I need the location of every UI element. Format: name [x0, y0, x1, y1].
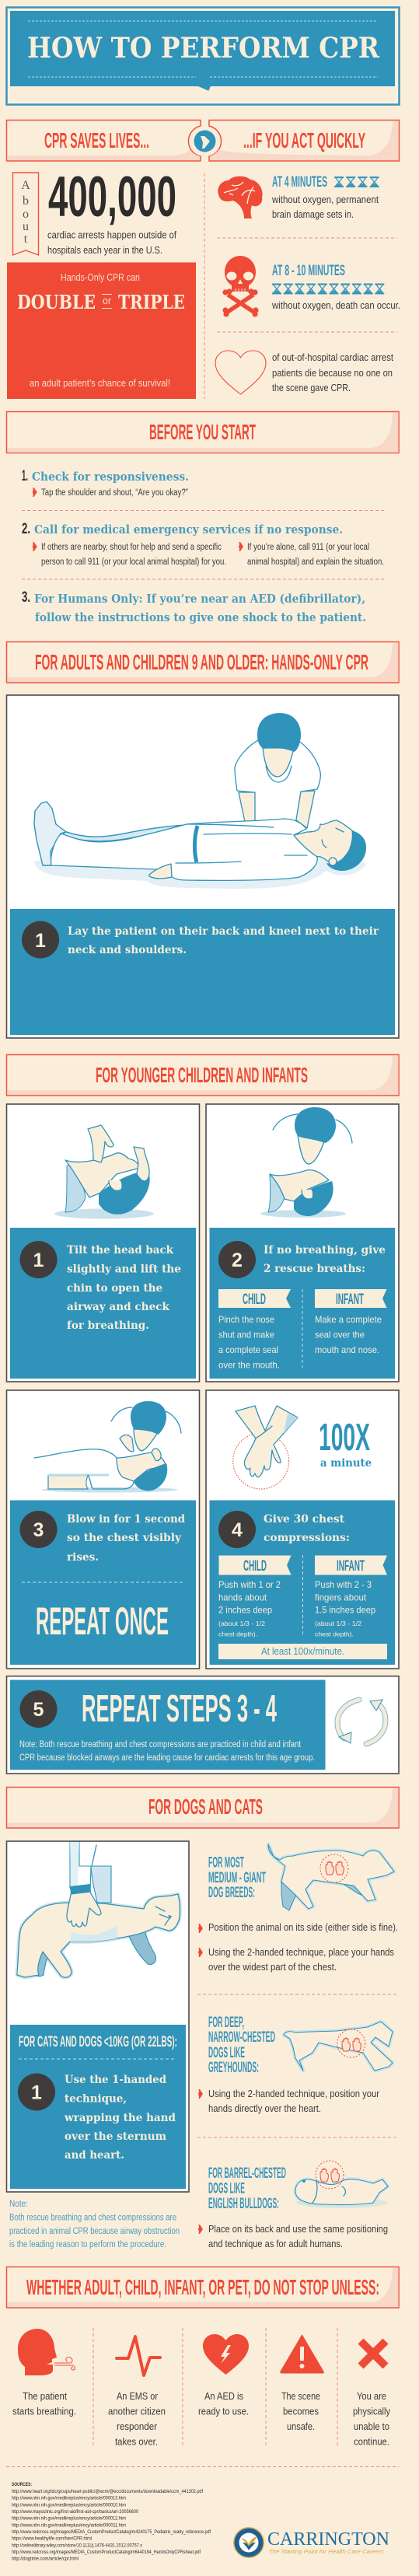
logo: Carrington: The Starting Point for Health Care Careers. — [269, 2548, 386, 2555]
caption box: Lay the patient on their back and kneel next to their — [68, 925, 379, 938]
block: medium to giant dogs — [198, 1844, 398, 1973]
100X a minute: 100X — [319, 1417, 370, 1459]
stop condition: EMS takes over: takes over. — [115, 2437, 158, 2448]
rescuer — [235, 713, 320, 828]
panel: step 5 repeat — [6, 1676, 399, 1774]
panel: step 3 blow — [6, 1390, 199, 1669]
caption box — [10, 1501, 196, 1665]
icon: heart with bolt — [203, 2334, 249, 2375]
banner: CPR saves lives — [6, 120, 400, 161]
rate bar — [218, 1644, 387, 1659]
animal note: Both rescue breathing and chest compressions are — [9, 2213, 176, 2222]
step number 2: 2 — [232, 1250, 243, 1271]
child breath instructions — [218, 1289, 291, 1370]
block: barrel-chested dogs: ENGLISH BULLDOGS: — [208, 2196, 279, 2212]
step number 5 — [20, 1690, 58, 1728]
icon: pulse line — [117, 2337, 160, 2375]
caption box: and heart. — [65, 2149, 124, 2162]
caption box: Tilt the head back — [67, 1244, 173, 1257]
animal note: is the leading reason to perform the procedure. — [9, 2240, 166, 2249]
infant breath instructions: mouth and nose. — [315, 1344, 379, 1355]
caption box: chin to open the — [67, 1282, 162, 1295]
stop condition: patient breathing: The patient — [23, 2391, 67, 2402]
icon: X mark — [361, 2341, 386, 2366]
step 3: For Humans Only: If you’re near an AED (defibrillator), — [34, 592, 365, 606]
child breath instructions: shut and make — [218, 1330, 274, 1340]
arrow icon — [194, 131, 216, 152]
ribbon: About: o — [23, 208, 29, 221]
step 1: Check for responsiveness. — [32, 470, 189, 484]
sources: http://www.heart.org/idc/groups/heart-public/@wcm/@ecc/documents/downloadable/ucm_441302.pdf — [12, 2489, 203, 2494]
step 2: If others are nearby, shout for help and send a specific — [41, 543, 222, 552]
child compressions: (about 1/3 - 1/2 — [218, 1620, 265, 1627]
infant breath instructions: seal over the — [315, 1330, 365, 1340]
stop condition: EMS takes over: An EMS or — [117, 2391, 158, 2402]
step 2: animal hospital) and explain the situation. — [247, 557, 384, 567]
caption box: technique, — [65, 2093, 127, 2106]
stop condition: scene unsafe — [281, 2335, 323, 2432]
step 2: person to call 911 (or your local animal hospital) for you. — [41, 557, 226, 567]
stop condition: scene unsafe: becomes — [283, 2406, 319, 2417]
block: deep narrow-chested dogs: FOR DEEP, — [208, 2015, 244, 2031]
stop condition: physically unable — [353, 2341, 391, 2448]
infant breath instructions: Make a complete — [315, 1314, 382, 1325]
icon: skull and crossbones — [222, 256, 259, 317]
infant breath instructions: INFANT — [336, 1291, 364, 1308]
infant compressions: fingers about — [315, 1592, 367, 1603]
infant compressions — [315, 1555, 387, 1638]
child compressions — [218, 1555, 291, 1638]
big number: 400,000 — [48, 166, 176, 229]
caption box — [10, 909, 395, 1035]
icon: head breathing — [18, 2329, 75, 2375]
caption box — [210, 1501, 395, 1665]
block: at 8-10 minutes — [222, 256, 400, 317]
note: CPR because blocked airways are the leading cause for cardiac arrests for this age group. — [19, 1753, 315, 1763]
stop condition: physically unable: unable to — [354, 2421, 389, 2432]
stop condition: EMS takes over: another citizen — [108, 2406, 166, 2417]
stat: 400,000: hospitals each year in the U.S. — [47, 245, 162, 256]
banner: do not stop unless — [6, 2267, 399, 2308]
block: at 4 minutes — [218, 174, 379, 220]
stop condition: AED ready: An AED is — [204, 2391, 243, 2402]
block: medium to giant dogs: MEDIUM - GIANT — [208, 1870, 266, 1886]
panel: adult hands-only CPR — [6, 695, 399, 1038]
sources: http://www.redcross.org/images/MEDIA_CustomProductCatalog/m4240175_Pediatric_ready_reference.pdf — [12, 2529, 211, 2535]
block: at 4 minutes: brain damage sets in. — [272, 209, 354, 220]
step number 1 — [18, 2073, 55, 2110]
step number 1: 1 — [35, 930, 46, 952]
infant compressions: Push with 2 - 3 — [315, 1579, 372, 1590]
caption box: 2 rescue breaths: — [264, 1263, 365, 1275]
block: deep narrow-chested dogs: hands directly over the heart. — [208, 2103, 321, 2114]
caption box: neck and shoulders. — [68, 944, 187, 956]
ribbon: About: u — [23, 220, 29, 233]
stop condition: physically unable: physically — [353, 2406, 391, 2417]
column divider — [204, 173, 205, 399]
caption box — [210, 1228, 395, 1379]
banner: adults and children — [6, 642, 399, 683]
panel: step 2 rescue breaths — [206, 1104, 399, 1382]
step 3: follow the instructions to give one shock to the patient. — [35, 611, 366, 624]
step number 1: 1 — [33, 1250, 44, 1271]
column dividers — [93, 2328, 337, 2446]
sources: http://www.nlm.nih.gov/medlineplus/ency/article/000013.htm — [12, 2496, 126, 2501]
sources: https://www.healthylife.com/hier/CPR.html — [12, 2536, 92, 2542]
caption box: If no breathing, give — [264, 1244, 386, 1257]
rate bar: At least 100x/minute. — [261, 1646, 344, 1657]
block: medium to giant dogs: Using the 2-handed technique, place your hands — [208, 1947, 394, 1958]
step number 3 — [20, 1511, 58, 1548]
caption box: slightly and lift the — [67, 1263, 181, 1275]
animal note: Note: — [9, 2200, 28, 2209]
description: cardiac arrests happen outside of — [47, 230, 176, 241]
child breath instructions: a complete seal — [218, 1344, 278, 1355]
step number 2 — [218, 1241, 256, 1278]
icon: 4 hourglasses — [334, 177, 379, 187]
block: heart statistic: patients die because no one on — [272, 368, 393, 379]
banner: CPR saves lives: CPR SAVES LIVES... — [44, 128, 149, 152]
red callout: Hands-Only CPR can — [61, 272, 140, 283]
ribbon: About: A — [21, 179, 30, 192]
child compressions: 2 inches deep — [218, 1605, 272, 1616]
banner: before you start: BEFORE YOU START — [149, 420, 256, 444]
block: heart statistic: of out-of-hospital cardiac arrest — [272, 352, 393, 363]
step 2: 2. — [22, 521, 30, 537]
banner: dogs and cats — [6, 1787, 399, 1828]
step 2: Call for medical emergency services if no response. — [34, 523, 343, 537]
block: barrel-chested dogs: DOGS LIKE — [208, 2180, 245, 2197]
sources: http://www.nlm.nih.gov/medlineplus/ency/article/000010.htm — [12, 2502, 126, 2508]
icon: repeat arrows — [337, 1700, 386, 1744]
caption box: rises. — [67, 1551, 99, 1564]
sources: SOURCES: — [12, 2482, 32, 2487]
infant compressions: (about 1/3 - 1/2 — [315, 1620, 361, 1627]
logo emblem — [233, 2527, 264, 2558]
step 1 — [22, 468, 189, 498]
stop condition: AED ready: ready to use. — [198, 2406, 249, 2417]
block: deep narrow-chested dogs — [198, 2015, 393, 2114]
child breath instructions: CHILD — [243, 1291, 266, 1308]
step number 1: 1 — [31, 2082, 42, 2104]
illustration: blowing into mouth — [34, 1401, 181, 1493]
step number 5: 5 — [33, 1699, 44, 1721]
block: heart statistic: the scene gave CPR. — [272, 383, 351, 393]
block: at 8-10 minutes: without oxygen, death can occur. — [271, 300, 400, 311]
caption box: so the chest visibly — [67, 1532, 182, 1544]
block: barrel-chested dogs: and technique as for adult humans. — [208, 2239, 343, 2249]
step number 4: 4 — [232, 1519, 243, 1541]
step 3 — [22, 589, 366, 624]
note — [19, 1740, 315, 1763]
100X a minute: a minute — [320, 1457, 372, 1470]
banner: dogs and cats: FOR DOGS AND CATS — [148, 1795, 263, 1819]
red callout — [7, 263, 196, 399]
banner: younger children — [6, 1054, 399, 1096]
infant compressions: chest depth). — [315, 1630, 354, 1638]
panel: step 4 compressions — [206, 1390, 399, 1669]
icon: 10 hourglasses — [272, 283, 384, 294]
block: deep narrow-chested dogs: GREYHOUNDS: — [208, 2060, 259, 2076]
illustration: head tilt — [54, 1125, 154, 1219]
stop condition: physically unable: continue. — [354, 2437, 389, 2448]
illustration: rescuer and patient — [34, 713, 367, 889]
block: deep narrow-chested dogs: Using the 2-handed technique, position your — [208, 2088, 379, 2099]
red callout: TRIPLE — [118, 291, 185, 313]
child compressions: CHILD — [243, 1558, 267, 1575]
step 3: 3. — [22, 589, 30, 606]
ribbon: About — [12, 173, 39, 255]
stop condition: EMS takes over — [108, 2337, 166, 2448]
sources — [12, 2482, 211, 2562]
caption box: airway and check — [67, 1301, 169, 1313]
infant breath instructions — [315, 1289, 387, 1355]
stop condition: scene unsafe: The scene — [281, 2391, 320, 2402]
step 2: If you’re alone, call 911 (or your local — [247, 543, 369, 552]
checklist — [22, 468, 385, 624]
child breath instructions: over the mouth. — [218, 1359, 280, 1370]
stop condition: EMS takes over: responder — [117, 2421, 157, 2432]
icon: heart outline — [215, 351, 266, 394]
title banner — [6, 8, 400, 104]
sources: http://dogtime.com/article/cpr.html — [12, 2557, 79, 2562]
step number 4 — [218, 1511, 256, 1548]
caption box — [10, 1228, 196, 1379]
block: at 4 minutes: without oxygen, permanent — [271, 194, 379, 205]
panel: step 1 tilt head — [6, 1104, 199, 1382]
caption box: FOR CATS AND DOGS <10KG (OR 22LBS): — [19, 2034, 177, 2050]
caption box: Give 30 chest — [264, 1513, 345, 1526]
block: medium to giant dogs: over the widest part of the chest. — [208, 1962, 337, 1973]
stop condition: AED ready — [198, 2334, 249, 2417]
title text: HOW TO PERFORM CPR — [27, 32, 380, 65]
caption box — [10, 2025, 186, 2189]
animal note: practiced in animal CPR because airway obstruction — [9, 2227, 180, 2236]
stop condition: patient breathing — [12, 2329, 76, 2417]
sources: http://www.mayoclinic.org/first-aid/first-aid-cpr/basics/art-20056600 — [12, 2509, 138, 2515]
red callout: an adult patient’s chance of survival! — [30, 378, 170, 389]
caption box: over the sternum — [65, 2130, 166, 2143]
stop condition: scene unsafe: unsafe. — [287, 2421, 315, 2432]
caption box: for breathing. — [67, 1319, 149, 1332]
stop condition: physically unable: You are — [357, 2391, 386, 2402]
logo: Carrington — [233, 2527, 389, 2558]
block: barrel-chested dogs: Place on its back and use the same positioning — [208, 2224, 388, 2235]
block: medium to giant dogs: DOG BREEDS: — [208, 1885, 255, 1901]
caption box: Use the 1-handed — [65, 2074, 166, 2086]
step 1: 1. — [22, 468, 28, 484]
block: deep narrow-chested dogs: NARROW-CHESTED — [208, 2029, 275, 2046]
step 1: Tap the shoulder and shout, “Are you okay?” — [41, 488, 188, 498]
red callout: DOUBLE — [17, 291, 96, 313]
stop condition: patient breathing: starts breathing. — [12, 2406, 76, 2417]
block: medium to giant dogs: Position the animal on its side (either side is fine). — [208, 1922, 398, 1933]
panel: cats and small dogs — [6, 1841, 189, 2192]
illustration: hand on cat — [17, 1842, 180, 1977]
stat: 400,000 — [12, 166, 176, 256]
patient — [34, 802, 366, 880]
illustration: bulldog on back — [295, 2161, 388, 2208]
step number 1 — [20, 1241, 58, 1278]
infant compressions: INFANT — [337, 1558, 365, 1575]
sources: http://www.nlm.nih.gov/medlineplus/ency/article/000011.htm — [12, 2522, 126, 2528]
block: medium to giant dogs: FOR MOST — [208, 1855, 244, 1871]
red callout: or — [103, 295, 111, 306]
caption box: Blow in for 1 second — [67, 1513, 185, 1526]
banner: before you start — [6, 412, 399, 453]
block: barrel-chested dogs: FOR BARREL-CHESTED — [208, 2165, 286, 2182]
infant compressions: 1.5 inches deep — [315, 1605, 375, 1616]
icon: brain — [218, 177, 263, 218]
child compressions: hands about — [218, 1592, 267, 1603]
sources: http://www.nlm.nih.gov/medlineplus/ency/article/000012.htm — [12, 2516, 126, 2522]
note: Note: Both rescue breathing and chest compressions are practiced in child and infant — [19, 1740, 302, 1749]
child breath instructions: Pinch the nose — [218, 1314, 274, 1325]
100X a minute — [319, 1417, 372, 1470]
block: at 4 minutes: AT 4 MINUTES — [272, 174, 327, 190]
icon: warning triangle — [281, 2335, 323, 2373]
ribbon: About: t — [24, 232, 28, 246]
ribbon: About: b — [23, 194, 29, 208]
step 2 — [22, 521, 384, 567]
sources: http://onlinelibrary.wiley.com/store/10.1111/j.1476-4431.2012.00757.x — [12, 2543, 143, 2548]
child compressions: Push with 1 or 2 — [218, 1579, 281, 1590]
step number 3: 3 — [33, 1519, 44, 1541]
sources: http://www.redcross.org/images/MEDIA_CustomProductCatalog/m6440194_HandsOnlyCPRsheet.pdf — [12, 2550, 201, 2555]
block: barrel-chested dogs — [198, 2161, 388, 2249]
illustration: greyhound — [284, 2022, 393, 2071]
child compressions: chest depth). — [218, 1630, 257, 1638]
block: at 8-10 minutes: AT 8 - 10 MINUTES — [272, 263, 345, 279]
caption box: REPEAT ONCE — [36, 1599, 169, 1643]
step number 1 — [22, 921, 59, 958]
caption box: wrapping the hand — [64, 2112, 176, 2124]
caption box: compressions: — [264, 1532, 350, 1544]
block: heart statistic — [215, 351, 393, 394]
logo: Carrington: CARRINGTON — [267, 2529, 389, 2550]
animal note — [9, 2200, 180, 2249]
block: deep narrow-chested dogs: DOGS LIKE — [208, 2045, 245, 2061]
illustration: hands with target circle — [233, 1406, 298, 1489]
illustration: rescue breath — [260, 1107, 352, 1218]
illustration: dog on side — [268, 1844, 394, 1910]
